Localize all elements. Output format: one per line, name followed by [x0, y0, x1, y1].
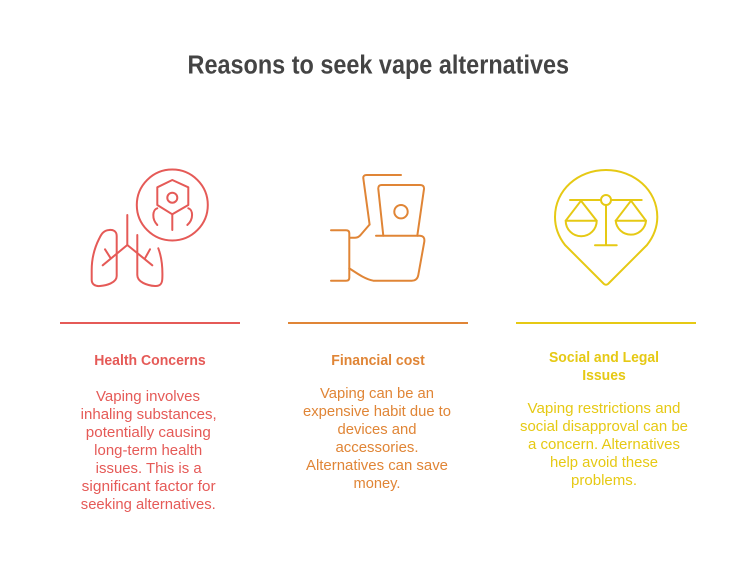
- text: health concerns description: [81, 389, 217, 513]
- text: health concerns description: inhaling substances,: [81, 407, 217, 423]
- icon: scales in map pin: [555, 170, 657, 285]
- title: Reasons to seek vape alternatives: [188, 52, 569, 80]
- panel: health concerns: [60, 170, 240, 513]
- text: health concerns description: significant factor for: [82, 479, 216, 495]
- text: social and legal description: social disapproval can be: [520, 419, 688, 435]
- text: financial cost description: expensive habit due to: [303, 404, 451, 420]
- text: social and legal description: [520, 401, 688, 489]
- text: social and legal description: Vaping restrictions and: [528, 401, 680, 417]
- text: financial cost description: devices and: [338, 422, 416, 438]
- heading: social and legal issues: [549, 350, 659, 384]
- text: financial cost description: Vaping can be an: [320, 386, 434, 402]
- divider: financial cost: [288, 322, 468, 324]
- heading: social and legal issues: Issues: [582, 368, 626, 384]
- text: health concerns description: issues. This is a: [96, 461, 203, 477]
- divider: social and legal: [516, 322, 696, 324]
- panel: social and legal issues: [516, 170, 696, 489]
- text: health concerns description: long-term health: [94, 443, 202, 459]
- text: social and legal description: a concern. Alternatives: [528, 437, 680, 453]
- icon: lungs and virus: [92, 170, 208, 286]
- heading: financial cost: Financial cost: [331, 353, 425, 369]
- heading: social and legal issues: Social and Legal: [549, 350, 659, 366]
- text: social and legal description: help avoid these: [550, 455, 658, 471]
- text: health concerns description: Vaping involves: [96, 389, 200, 405]
- text: financial cost description: [303, 386, 451, 492]
- panel: financial cost: [288, 175, 468, 492]
- text: health concerns description: potentially causing: [86, 425, 211, 441]
- divider: health concerns: [60, 322, 240, 324]
- text: financial cost description: Alternatives can save: [306, 458, 448, 474]
- text: financial cost description: accessories.: [336, 440, 418, 456]
- text: health concerns description: seeking alternatives.: [81, 497, 216, 513]
- text: financial cost description: money.: [354, 476, 400, 492]
- heading: health concerns: Health Concerns: [94, 353, 206, 369]
- icon: hand holding money: [331, 175, 424, 281]
- text: social and legal description: problems.: [571, 473, 637, 489]
